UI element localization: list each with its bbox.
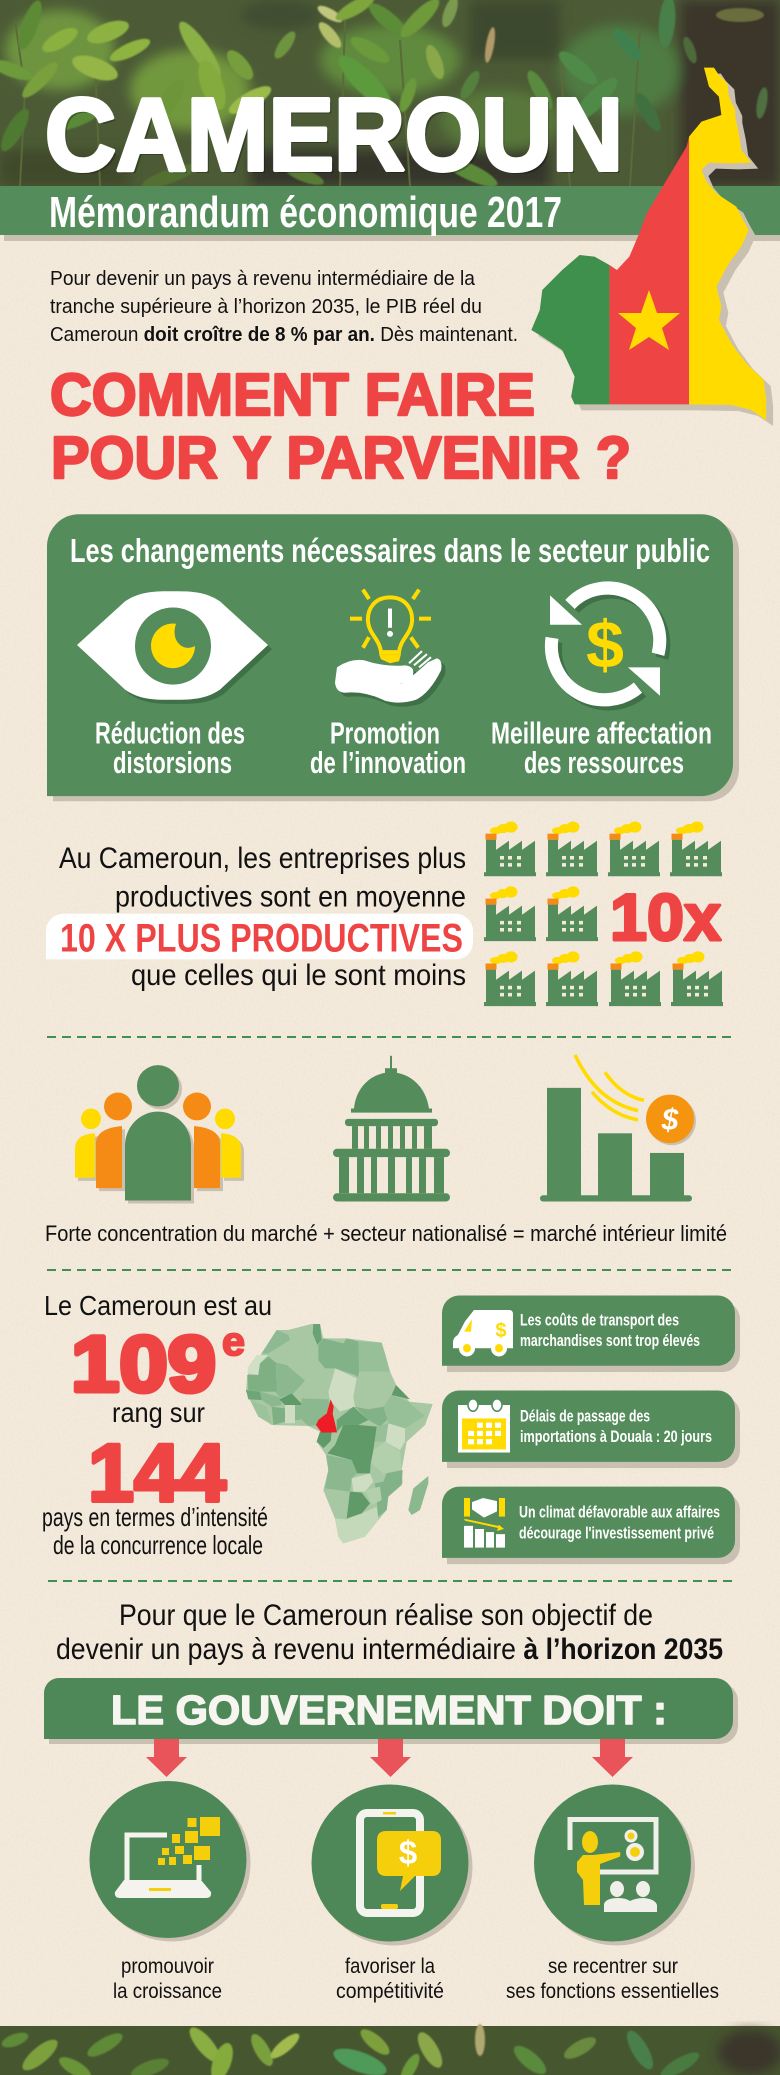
icon: falling bar chart with coin xyxy=(540,1055,696,1201)
icon: light bulb on hand xyxy=(335,591,446,707)
intro paragraph xyxy=(50,267,518,346)
ranking text xyxy=(42,1290,272,1560)
label: innovation: de l’innovation xyxy=(310,747,466,780)
icon: capitol building xyxy=(333,1056,450,1201)
panel: public sector changes xyxy=(47,514,739,801)
total 144: 144 xyxy=(88,1428,226,1519)
ranking text: de la concurrence locale xyxy=(53,1530,263,1560)
ranking text: Le Cameroun est au xyxy=(44,1290,272,1321)
banner: le gouvernement doit: LE GOUVERNEMENT DOIT : xyxy=(111,1687,667,1733)
label: core functions: se recentrer sur xyxy=(548,1955,678,1978)
header photo: foliage xyxy=(0,0,780,193)
arrow 2 xyxy=(370,1739,411,1777)
objective statement xyxy=(56,1599,723,1666)
icon: presenter with gears xyxy=(570,1820,657,1912)
icon: dollar with circular arrows xyxy=(550,588,664,704)
banner: le gouvernement doit xyxy=(44,1678,738,1744)
green subtitle band xyxy=(0,186,780,241)
ranking text: pays en termes d’intensité xyxy=(42,1502,268,1532)
card: transport costs xyxy=(442,1296,740,1372)
label: growth xyxy=(113,1955,222,2003)
objective statement: Pour que le Cameroun réalise son objectif de xyxy=(119,1599,653,1632)
intro paragraph: Pour devenir un pays à revenu intermédiaire de la xyxy=(50,267,476,290)
rank 109e: e xyxy=(222,1320,245,1364)
label: distortions: distorsions xyxy=(113,747,232,780)
circle: competitiveness xyxy=(312,1784,472,1946)
label: resources: Meilleure affectation xyxy=(491,717,712,750)
map of Cameroon in flag colours xyxy=(531,68,773,426)
icon: eye xyxy=(77,591,272,704)
intro paragraph: tranche supérieure à l’horizon 2035, le PIB réel du xyxy=(50,295,482,318)
circle: core functions xyxy=(534,1784,695,1946)
card: import delays xyxy=(442,1391,740,1468)
10x label: 10x xyxy=(610,881,721,954)
label: distortions xyxy=(95,717,245,780)
label: competitiveness xyxy=(336,1955,444,2003)
footer photo: foliage xyxy=(0,2023,780,2075)
card: transport costs: Les coûts de transport des xyxy=(520,1311,679,1330)
heading: comment faire: COMMENT FAIRE xyxy=(50,362,535,428)
heading: comment faire xyxy=(50,362,631,491)
heading: comment faire: POUR Y PARVENIR ? xyxy=(51,425,631,491)
title: CAMEROUN xyxy=(48,80,626,195)
icon: phone with dollar bubble xyxy=(360,1812,441,1913)
title: CAMEROUN xyxy=(45,77,623,192)
productivity text: que celles qui le sont moins xyxy=(131,960,466,992)
label: growth: la croissance xyxy=(113,1980,222,2003)
productivity text: Au Cameroun, les entreprises plus xyxy=(59,843,466,875)
label: growth: promouvoir xyxy=(121,1955,214,1978)
factory pictogram grid xyxy=(484,822,723,1006)
ranking text: rang sur xyxy=(112,1397,205,1428)
icon: truck xyxy=(453,1310,513,1356)
productivity text xyxy=(46,843,473,992)
label: distortions: Réduction des xyxy=(95,717,245,750)
card: import delays: importations à Douala : 20 jours xyxy=(520,1428,712,1446)
label: resources: des ressources xyxy=(524,747,684,780)
highlight pill: 10 X PLUS PRODUCTIVES xyxy=(60,916,463,960)
arrow 3 xyxy=(592,1739,633,1777)
card: import delays: Délais de passage des xyxy=(520,1407,650,1426)
objective statement: devenir un pays à revenu intermédiaire à l’horizon 2035 xyxy=(56,1633,723,1666)
label: innovation xyxy=(310,717,466,780)
label: competitiveness: favoriser la xyxy=(345,1955,435,1978)
icon: group of people xyxy=(75,1065,244,1204)
productivity text: productives sont en moyenne xyxy=(115,882,466,914)
icon: calendar xyxy=(458,1399,510,1453)
label: competitiveness: compétitivité xyxy=(336,1980,444,2003)
label: resources xyxy=(491,717,712,780)
label: core functions xyxy=(506,1955,719,2003)
icon: handshake and falling bars xyxy=(464,1498,505,1548)
card: business climate: Un climat défavorable aux affaires xyxy=(519,1503,720,1522)
label: innovation: Promotion xyxy=(330,717,440,750)
label: core functions: ses fonctions essentielles xyxy=(506,1980,719,2003)
subtitle text: Mémorandum économique 2017 xyxy=(49,188,562,237)
intro paragraph: Cameroun doit croître de 8 % par an. Dès maintenant. xyxy=(50,323,518,346)
map of Africa with Cameroon highlighted xyxy=(246,1324,433,1543)
card: transport costs: marchandises sont trop élevés xyxy=(520,1332,700,1350)
flag star xyxy=(618,290,680,350)
rank 109e: 109 xyxy=(71,1319,216,1408)
arrow 1 xyxy=(146,1739,187,1777)
icon: phone with dollar bubble: $ xyxy=(399,1834,417,1871)
icon: truck: $ xyxy=(495,1320,507,1342)
circle: growth xyxy=(90,1781,250,1942)
Cameroon highlight xyxy=(316,1399,337,1433)
icon: dollar with circular arrows: $ xyxy=(586,608,624,682)
card: business climate: décourage l'investissement privé xyxy=(519,1524,714,1542)
icon: falling bar chart with coin: $ xyxy=(661,1103,679,1137)
icon: laptop with pixels xyxy=(115,1817,220,1898)
card: business climate xyxy=(442,1487,740,1564)
